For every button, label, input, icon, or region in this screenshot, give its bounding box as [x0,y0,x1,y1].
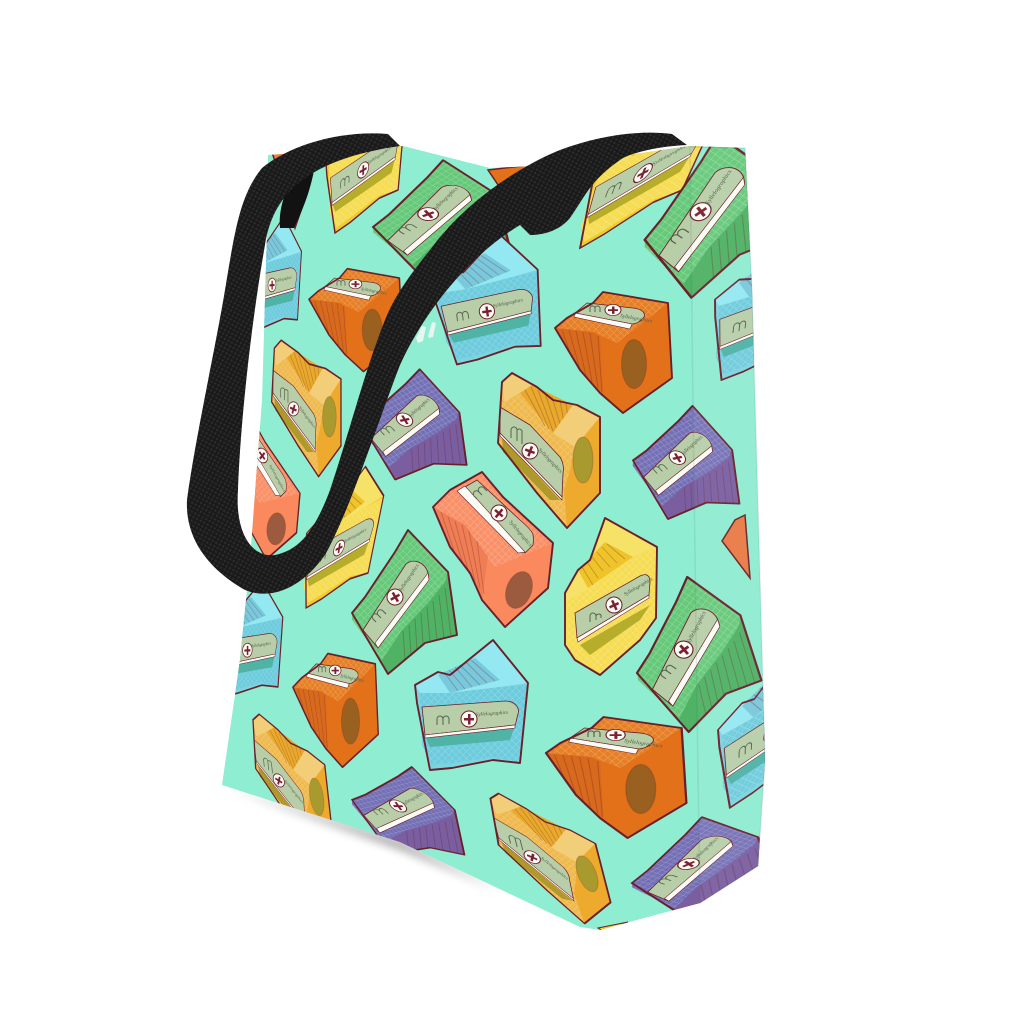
sharpener: blue lower left: Syllelographics [251,641,271,649]
sharpener: blue left [264,222,302,328]
sliver: yellow bottom corner [598,922,628,932]
sharpener: yellow centre right [565,518,657,675]
sharpener: small orange: Syllelographics [340,673,364,683]
sharpener: blue right side: Syllelographics [773,296,805,314]
sharpener: amber bottom [489,792,612,924]
sharpener: green centre [352,530,457,674]
sharpener: large orange lower [546,717,686,838]
sharpener: salmon centre [433,472,553,627]
black shoulder strap [187,133,687,594]
sharpener: green top right: Syllelographics [704,169,734,205]
side panel fold [690,147,765,903]
sharpener: yellow top [326,146,403,234]
sharpener: yellow left: Syllelographics [344,526,367,544]
strap end: inner attachment [280,148,315,228]
sharpener: yellow top right: Syllelographics [651,142,690,168]
sharpener: amber centre: Syllelographics [537,447,563,475]
sharpener: yellow left [304,466,384,609]
sharpener: purple centre: Syllelographics [408,398,432,419]
sharpener: blue lower right side: Syllelographics [779,701,813,727]
sharpener: yellow top: Syllelographics [368,145,391,165]
sharpener: salmon centre: Syllelographics [507,519,533,548]
bag body [222,146,765,930]
sharpener: blue left: Syllelographics [275,275,292,283]
sharpener: green top right [644,146,750,299]
sharpener: orange near strap [309,269,403,372]
sharpener: green right [636,576,762,734]
sharpener: large orange upper [555,292,672,413]
sliver: salmon right side [722,515,750,578]
sharpener: green centre: Syllelographics [398,563,421,593]
sliver: orange top left [272,154,303,230]
sharpener: blue centre top [436,236,542,366]
sharpener: large orange lower: Syllelographics [624,738,664,750]
sharpener: green right: Syllelographics [686,610,708,644]
sharpener: yellow top right [579,146,703,250]
sliver: orange behind strap [486,166,527,185]
ground shadow [226,787,500,890]
sharpener: blue lower left [235,592,284,694]
sharpener: orange near strap: Syllelographics [361,286,387,296]
sharpener: blue centre top: Syllelographics [492,298,524,310]
sharpener: blue right side [714,274,754,381]
sharpener: salmon left [252,430,301,556]
sharpener: amber left: Syllelographics [298,405,317,430]
sharpener: amber left [272,340,341,477]
sharpener: blue centre bottom: Syllelographics [476,710,508,718]
sharpener: salmon left: Syllelographics [269,464,287,493]
sharpener: purple bottom right [630,816,760,910]
tote bag illustration [186,132,766,930]
sharpener: purple bottom: Syllelographics [402,792,426,806]
sharpener: purple right: Syllelographics [681,435,705,456]
sharpener: green top centre [371,160,510,276]
sharpener: large orange upper: Syllelographics [620,313,652,325]
sharpener: amber bottom: Syllelographics [539,856,569,881]
sharpener: purple centre [372,368,468,480]
sharpener: purple bottom right: Syllelographics [692,837,721,860]
sharpener: purple right [632,405,740,520]
sharpener pattern [186,132,765,930]
sharpener: yellow centre right: Syllelographics [623,576,654,598]
sharpener: blue centre bottom [415,640,528,770]
sharpener: green top centre: Syllelographics [432,187,460,211]
sharpener: amber centre [498,373,600,528]
faint white mark near strap [416,322,436,343]
sharpener: blue lower right side [717,685,765,809]
sharpener: amber bottom left: Syllelographics [284,779,305,805]
sharpener: amber bottom left [252,713,332,820]
sharpener: purple bottom [351,766,466,856]
sharpener: small orange [293,653,378,767]
